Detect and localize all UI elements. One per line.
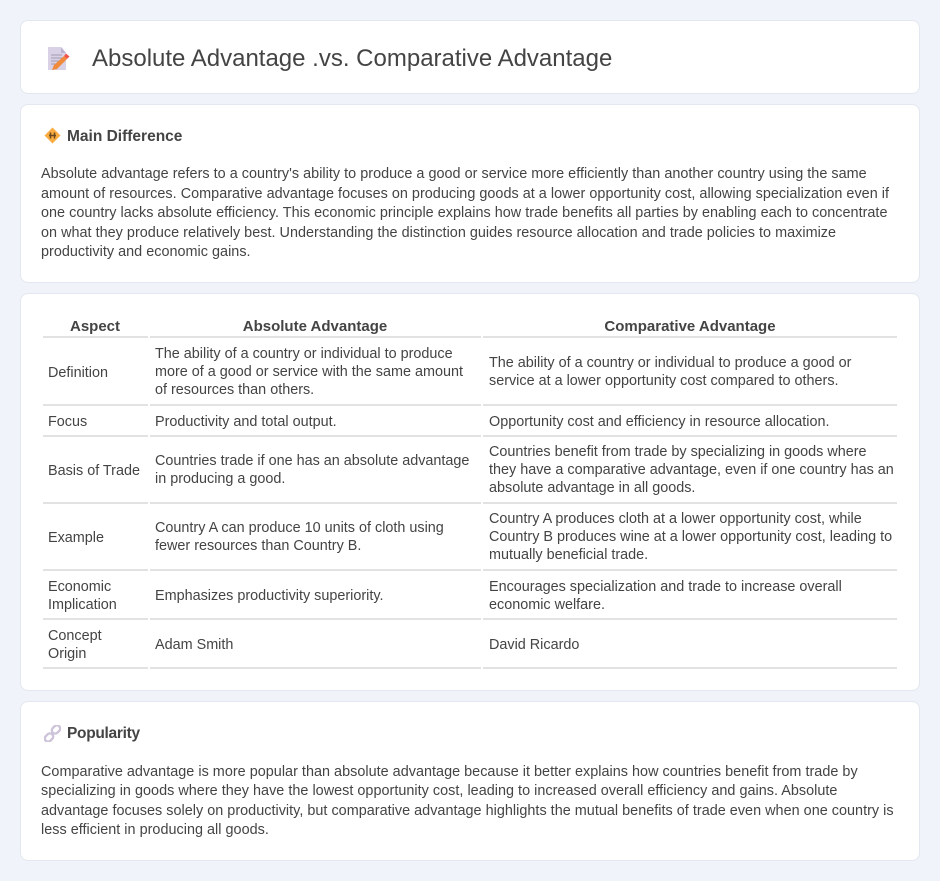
panel: comparison table: David Ricardo [489,637,579,653]
panel: comparison table: Country A can produce 10 units of cloth using [155,520,444,536]
panel: popularity [20,701,920,861]
table header: aspect: Aspect [70,318,120,335]
text block: popularity paragraph: Comparative advantage is more popular than absolute advantage because it better explains how countries benefit from trade by [41,764,858,780]
panel: comparison table: Countries benefit from trade by specializing in goods where [489,444,867,460]
icon: document with pencil [48,47,70,70]
panel: main difference [20,104,920,283]
text block: main difference paragraph: Absolute advantage refers to a country's ability to produce a good or service more efficiently than another country using the same [41,166,867,182]
panel: comparison table: Countries trade if one has an absolute advantage [155,453,469,469]
panel: comparison table: absolute advantage in all goods. [489,480,695,496]
row: example: Example [48,530,104,546]
text block: main difference paragraph [41,166,890,260]
panel: comparison table: Encourages specialization and trade to increase overall [489,579,842,595]
panel: comparison table: mutually beneficial trade. [489,547,648,563]
panel: comparison table: The ability of a country or individual to produce [155,346,453,362]
panel: comparison table: economic welfare. [489,597,605,613]
panel: comparison table [20,293,920,691]
heading: popularity: Popularity [67,725,140,742]
panel: comparison table: Emphasizes productivity superiority. [155,588,383,604]
row: concept origin: Concept [48,628,102,644]
table header: absolute advantage: Absolute Advantage [243,318,387,335]
panel: comparison table: The ability of a country or individual to produce a good or [489,355,851,371]
icon: chain link [44,725,61,742]
panel: title header [20,20,920,94]
text block: main difference paragraph: productivity and economic gains. [41,244,251,260]
text block: popularity paragraph: specializing in goods where they have the lowest opportunity cost, leading to increased overall efficiency and gains. Absolute [41,783,837,799]
row: economic implication [48,579,117,613]
text block: popularity paragraph [41,764,894,838]
panel: comparison table: Productivity and total output. [155,414,337,430]
row: economic implication: Implication [48,597,117,613]
row: concept origin [48,628,102,662]
text block: popularity paragraph: advantage focuses solely on productivity, but comparative advantage highlights the mutual benefits of trade even when one country is [41,803,894,819]
panel: comparison table: Country A produces cloth at a lower opportunity cost, while [489,511,862,527]
panel: comparison table: they have a comparative advantage, even if one country has an [489,462,894,478]
row: economic implication: Economic [48,579,111,595]
text block: popularity paragraph: less efficient in producing all goods. [41,822,269,838]
panel: comparison table: Opportunity cost and efficiency in resource allocation. [489,414,830,430]
panel: comparison table: service at a lower opportunity cost compared to others. [489,373,839,389]
panel: comparison table: of resources than others. [155,382,314,398]
row: basis of trade: Basis of Trade [48,463,140,479]
text block: main difference paragraph: on what they produce relatively best. Understanding the distinction guides resource allocation and trade policies to maximize [41,225,836,241]
text block: main difference paragraph: one country lacks absolute efficiency. This economic principle explains how trade benefits all parties by enabling each to concentrate [41,205,888,221]
row: concept origin: Origin [48,646,86,662]
icon: orange diamond [44,128,60,144]
text block: main difference paragraph: amount of resources. Comparative advantage focuses on producing goods at a lower opportunity cost, allowing specialization even if [41,186,889,202]
heading: main difference: Main Difference [67,128,182,145]
panel: comparison table: fewer resources than Country B. [155,538,361,554]
panel: comparison table: Country B produces wine at a lower opportunity cost, leading to [489,529,892,545]
row: definition: Definition [48,365,108,381]
table header: comparative advantage: Comparative Advantage [604,318,776,335]
title: Absolute Advantage .vs. Comparative Advantage [92,45,612,72]
panel: comparison table: more of a good or service with the same amount [155,364,463,380]
panel: comparison table: in producing a good. [155,471,285,487]
panel: comparison table: Adam Smith [155,637,233,653]
row: focus: Focus [48,414,87,430]
